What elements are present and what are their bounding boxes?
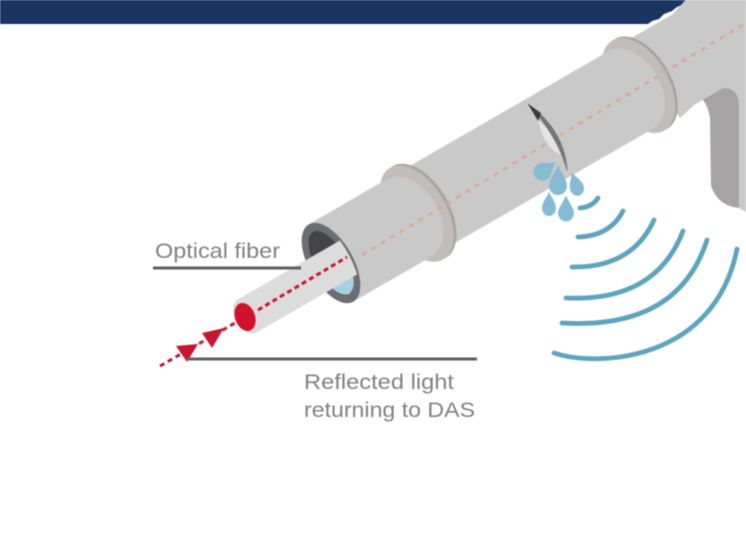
pipe opening <box>290 213 372 313</box>
label: reflected light: Reflected light <box>304 371 454 394</box>
fiber red dotted light path <box>258 257 347 310</box>
arrowhead: lower <box>176 344 198 362</box>
label: reflected light <box>187 359 477 422</box>
arrowhead: upper <box>202 328 224 348</box>
fiber tube <box>227 240 360 338</box>
pipe body <box>309 4 734 302</box>
red fiber core <box>231 300 259 334</box>
header band <box>0 0 690 24</box>
pipe elbow <box>640 0 746 212</box>
water drops <box>530 155 586 222</box>
label: reflected light: returning to DAS <box>304 399 475 422</box>
outgoing dotted light path <box>160 323 235 366</box>
pipe flange: far <box>556 24 693 163</box>
pipe <box>208 0 739 364</box>
sound waves <box>554 198 737 359</box>
pipe dashed light path <box>362 23 746 255</box>
label: optical fiber: Optical fiber <box>155 240 280 263</box>
crack in pipe <box>528 104 567 170</box>
pipe flange: near <box>339 151 472 289</box>
